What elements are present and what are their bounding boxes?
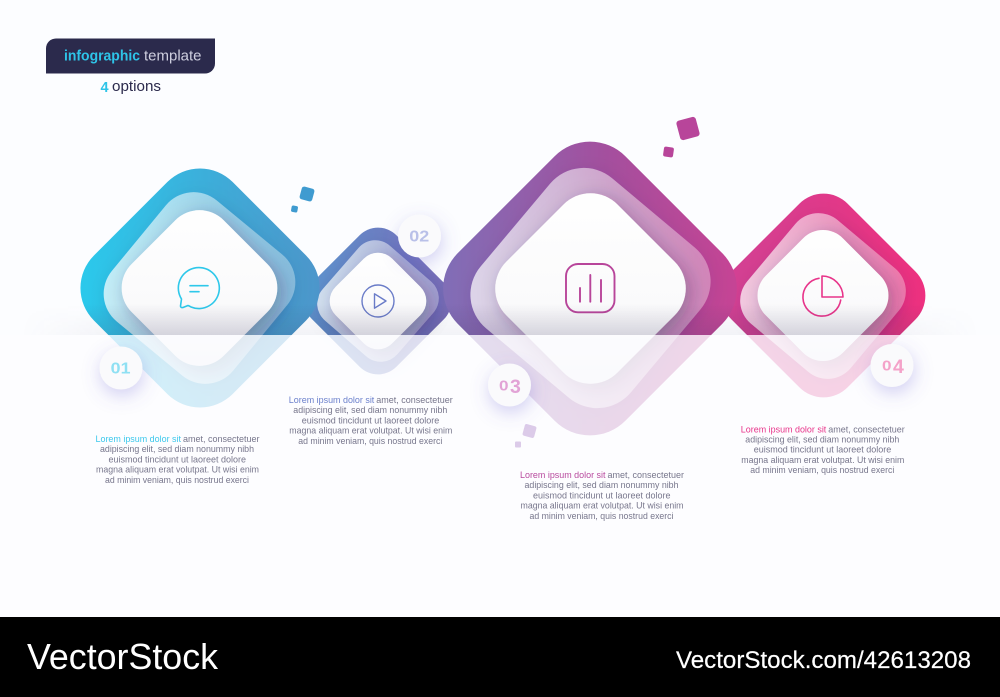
text block 02: magna aliquam erat volutpat. Ut wisi enim [289,426,453,436]
diamond 2 [294,217,462,385]
icon: speech bubble [178,268,219,309]
header badge: infographic [64,48,140,64]
diamond 3 [422,121,758,456]
text block 04 [741,424,905,475]
number badge 04: 0 [882,358,892,374]
number badge 03: 0 [499,378,509,394]
text block 04: ad minim veniam, quis nostrud exerci [750,465,894,475]
text block 01 [96,434,260,485]
text block 01: amet, consectetuer [183,434,260,444]
text block 04: Lorem ipsum dolor sit [741,424,827,434]
text block 02: euismod tincidunt ut laoreet dolore [302,415,439,425]
text block 03: Lorem ipsum dolor sit [520,470,606,480]
text block 04: euismod tincidunt ut laoreet dolore [754,445,891,455]
number badge 03 [488,364,531,406]
number badge 03: 3 [510,376,521,398]
reflection floor [0,335,1000,617]
text block 02 [289,395,453,446]
text block 02: amet, consectetuer [376,395,453,405]
text block 01: magna aliquam erat volutpat. Ut wisi enim [96,465,259,475]
text block 03: euismod tincidunt ut laoreet dolore [533,490,670,500]
subtitle: 4 options: options [112,79,161,95]
footer bar: VectorStock [27,636,219,677]
number badge 04 [870,344,914,387]
number badge 04: 4 [893,356,904,378]
number badge 02 [398,214,441,258]
number badge 02: 02 [409,228,429,246]
text block 02: ad minim veniam, quis nostrud exerci [298,436,442,446]
text block 04: magna aliquam erat volutpat. Ut wisi enim [741,455,905,465]
text block 04: adipiscing elit, sed diam nonummy nibh [745,435,899,445]
header badge [46,38,215,74]
text block 02: adipiscing elit, sed diam nonummy nibh [293,405,447,415]
number badge 01 [100,346,142,390]
text block 03: magna aliquam erat volutpat. Ut wisi enim [520,501,684,511]
footer bar: VectorStock.com/42613208 [676,647,971,674]
diamond 1 [61,149,339,427]
text block 03: ad minim veniam, quis nostrud exerci [530,511,674,521]
text block 03 [520,470,684,521]
text block 01: adipiscing elit, sed diam nonummy nibh [100,444,254,454]
horizon shadow on background [90,330,902,335]
decorative squares magenta [663,116,700,158]
diamond 4 [708,180,939,411]
decorative squares blue [291,186,315,213]
horizon shadow on diamonds [92,314,918,335]
text block 01: Lorem ipsum dolor sit [96,434,181,444]
decorative squares pale purple [515,424,537,448]
text block 03: adipiscing elit, sed diam nonummy nibh [524,480,678,490]
icon: pie chart [803,276,843,316]
text block 01: euismod tincidunt ut laoreet dolore [108,454,246,464]
text block 01: ad minim veniam, quis nostrud exerci [105,475,249,485]
icon: bar chart [566,264,614,312]
header badge: template [144,48,202,64]
footer bar [0,617,1000,697]
text block 04: amet, consectetuer [828,424,905,434]
number badge 01: 01 [111,360,131,378]
text block 02: Lorem ipsum dolor sit [289,395,375,405]
icon: play button [362,285,394,317]
text block 03: amet, consectetuer [608,470,684,480]
subtitle: 4 options: 4 [100,80,109,96]
